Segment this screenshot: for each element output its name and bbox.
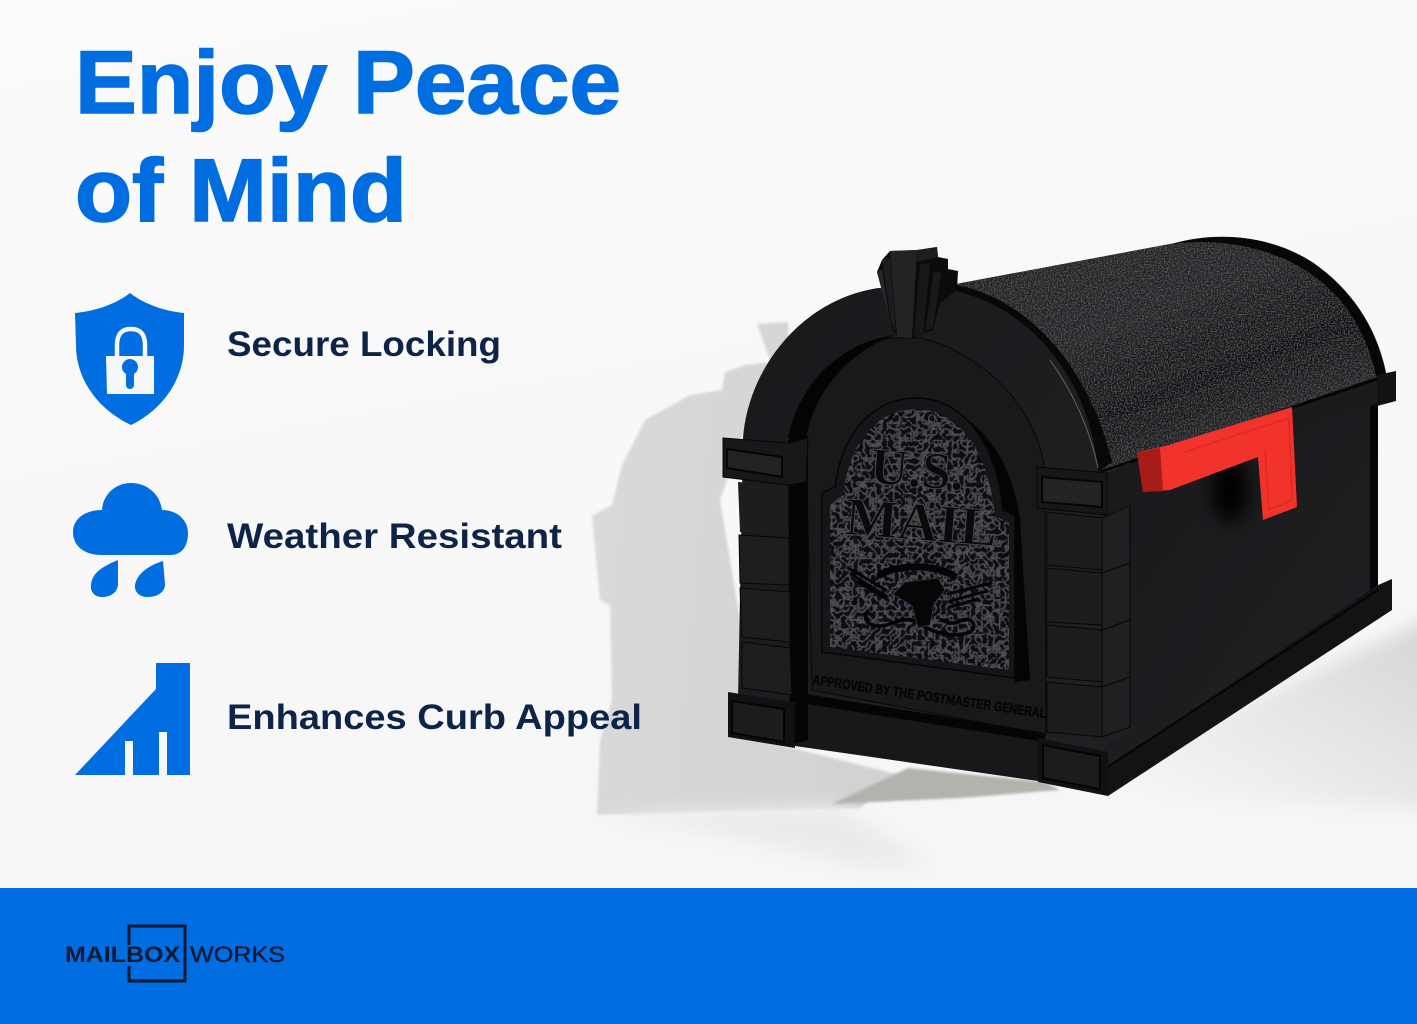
- side band: [1128, 376, 1380, 500]
- label: secure locking: Secure Locking: [227, 325, 501, 364]
- finial: [877, 247, 958, 338]
- red flag: [1137, 407, 1297, 520]
- right column: [1037, 462, 1130, 796]
- label: weather resistant: Weather Resistant: [227, 517, 562, 556]
- us mail lettering: [843, 436, 1003, 558]
- feature: weather resistant: [73, 483, 562, 597]
- title: [75, 32, 621, 240]
- icon: rain cloud: [73, 483, 188, 597]
- logo: [65, 926, 285, 981]
- left column: [723, 436, 808, 748]
- title: of Mind: [75, 140, 407, 240]
- left capital: [723, 438, 808, 485]
- panel: [822, 398, 1030, 682]
- rear flange top: [1377, 371, 1396, 406]
- approved text: APPROVED BY THE POSTMASTER GENERAL: [812, 672, 1047, 721]
- label: enhances curb appeal: Enhances Curb Appeal: [227, 698, 642, 737]
- eagle emblem: [848, 567, 991, 635]
- logo wordmark mailbox: MAILBOX: [65, 942, 180, 967]
- mailbox side: [1085, 378, 1378, 775]
- us mail lettering: U.S.: [868, 438, 966, 502]
- roof rear rim: [1172, 237, 1386, 376]
- contact shadow under mailbox: [832, 768, 1060, 804]
- footer band: [0, 888, 1417, 1024]
- floor shadow right: [1090, 600, 1417, 810]
- logo box: [129, 926, 185, 981]
- icon: shield with padlock: [75, 293, 184, 425]
- floor shadow below: [598, 805, 930, 868]
- flag shadow: [1212, 458, 1248, 522]
- right base block: [1038, 738, 1108, 796]
- right capital: [1037, 467, 1108, 515]
- cast shadow on wall: [592, 322, 900, 815]
- left base block: [728, 692, 795, 748]
- mailbox: [723, 237, 1396, 796]
- front arch: [738, 288, 1104, 770]
- arch inner shoulder: [790, 338, 1046, 735]
- feature: enhances curb appeal: [75, 663, 642, 775]
- arch highlight: [1050, 360, 1098, 468]
- icon: rising house bars: [75, 663, 190, 775]
- arch shadow groove: [788, 335, 895, 445]
- base bar: [795, 700, 1045, 782]
- mailbox roof: [945, 237, 1386, 490]
- rear flange bottom: [1104, 579, 1392, 796]
- rear edge strip: [1370, 404, 1378, 594]
- logo wordmark works: WORKS: [190, 942, 285, 967]
- dark rim between arch and roof: [950, 284, 1112, 472]
- us mail lettering: MAIL: [843, 486, 999, 558]
- title: Enjoy Peace: [75, 32, 621, 132]
- feature: secure locking: [75, 293, 501, 425]
- hammered texture: [830, 409, 1009, 670]
